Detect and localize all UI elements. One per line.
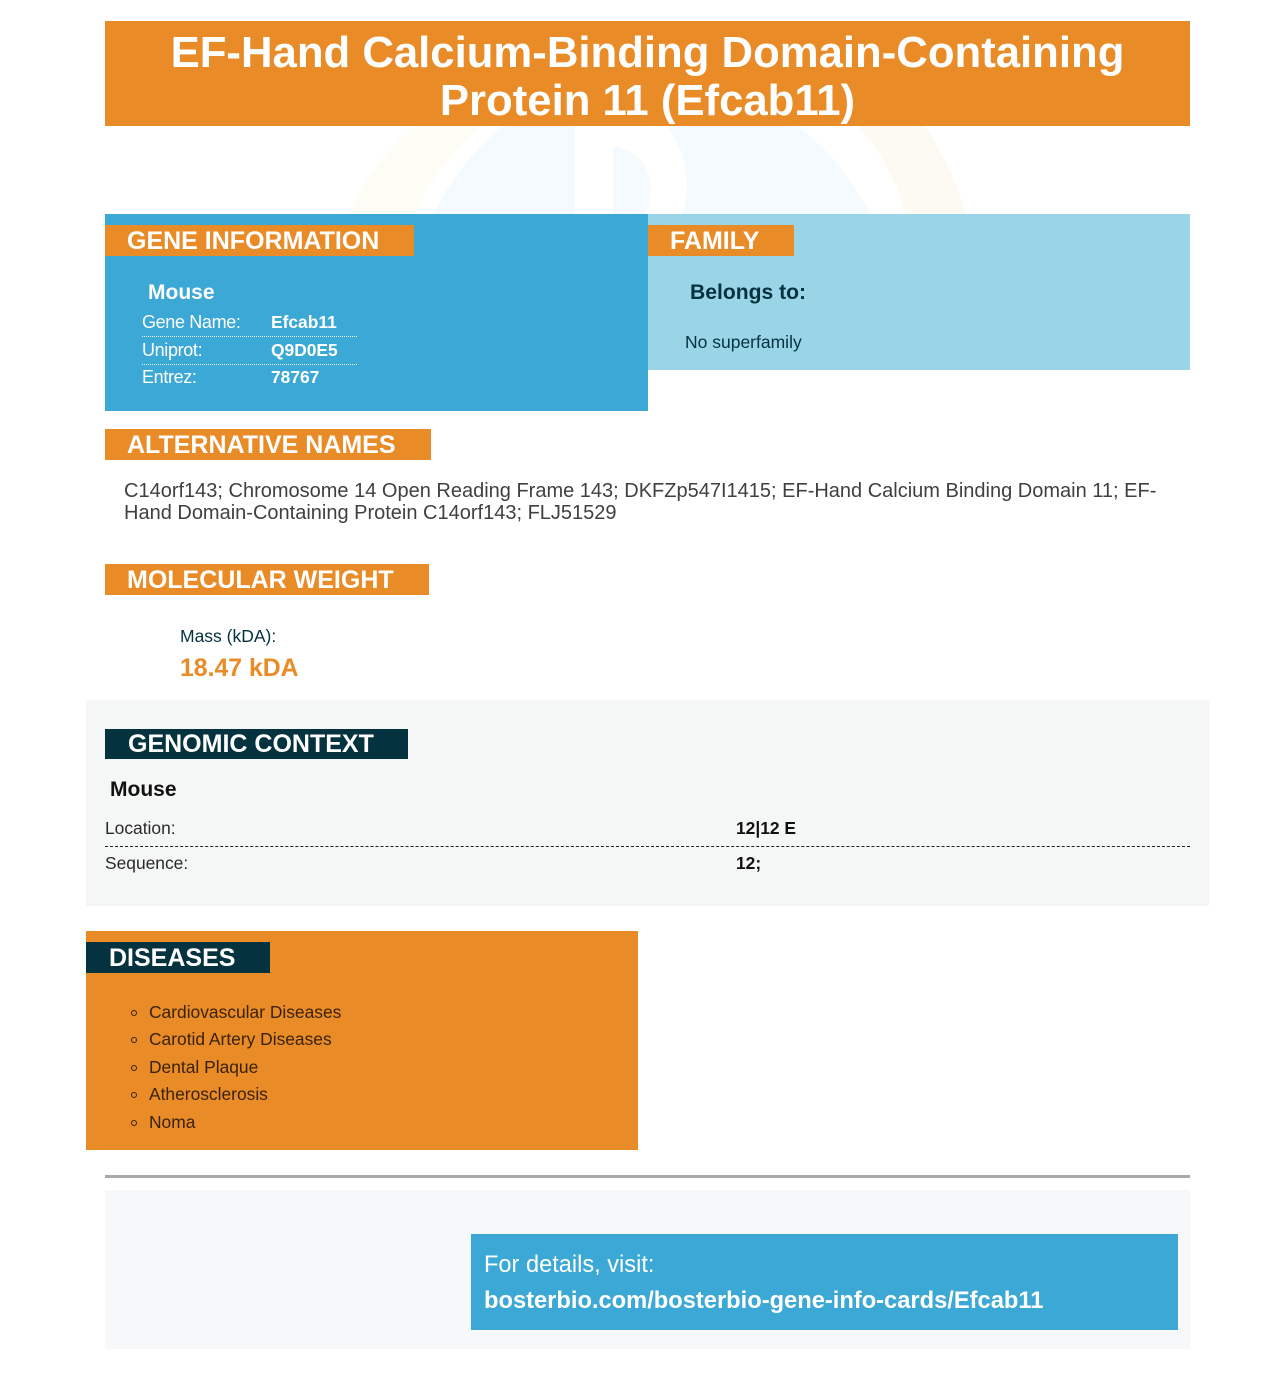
row: location: Location: xyxy=(105,818,176,838)
row: location: 12|12 E xyxy=(736,818,796,838)
belongs to label: Belongs to: xyxy=(690,281,806,304)
alternative names text xyxy=(124,480,1156,524)
title banner xyxy=(105,21,1190,126)
panel: family xyxy=(648,214,1190,370)
panel: gene information xyxy=(105,214,648,411)
row: sequence: 12; xyxy=(736,853,761,873)
heading: family xyxy=(648,225,794,256)
row: gene name xyxy=(142,309,357,337)
row: uniprot: Uniprot: xyxy=(142,340,202,360)
panel: genomic context xyxy=(86,700,1209,906)
panel: diseases xyxy=(86,931,638,1150)
title banner: EF-Hand Calcium-Binding Domain-Containing xyxy=(171,28,1124,77)
item: cardiovascular diseases: Cardiovascular Diseases xyxy=(149,1002,341,1022)
species label: Mouse xyxy=(110,778,177,801)
footer rule xyxy=(105,1175,1190,1178)
row: sequence xyxy=(105,853,761,873)
row: entrez: Entrez: xyxy=(142,367,197,387)
heading: family: FAMILY xyxy=(670,227,759,255)
alternative names text: Hand Domain-Containing Protein C14orf143; FLJ51529 xyxy=(124,502,617,524)
heading: diseases xyxy=(86,942,270,973)
row: sequence: Sequence: xyxy=(105,853,188,873)
species label: Mouse xyxy=(148,281,215,304)
callout label: For details, visit: xyxy=(484,1252,654,1278)
heading: molecular weight: MOLECULAR WEIGHT xyxy=(127,566,394,594)
item: dental plaque: Dental Plaque xyxy=(149,1057,258,1077)
disease list xyxy=(131,1002,341,1132)
watermark logo xyxy=(348,126,966,214)
row: entrez: 78767 xyxy=(271,367,319,387)
title banner: Protein 11 (Efcab11) xyxy=(440,76,855,125)
heading: genomic context: GENOMIC CONTEXT xyxy=(128,730,374,758)
item: atherosclerosis: Atherosclerosis xyxy=(149,1084,268,1104)
mass label: Mass (kDA): xyxy=(180,626,276,646)
panel: footer xyxy=(105,1190,1190,1349)
callout url: bosterbio.com/bosterbio-gene-info-cards/Efcab11 xyxy=(484,1288,1043,1314)
row: uniprot xyxy=(142,337,357,365)
row: entrez xyxy=(142,367,319,387)
heading: alternative names: ALTERNATIVE NAMES xyxy=(127,431,396,459)
alternative names text: C14orf143; Chromosome 14 Open Reading Frame 143; DKFZp547I1415; EF-Hand Calcium Binding Domain 11; EF- xyxy=(124,480,1156,502)
item: noma: Noma xyxy=(149,1112,195,1132)
row: gene name: Gene Name: xyxy=(142,312,241,332)
row: uniprot: Q9D0E5 xyxy=(271,340,338,360)
row: location xyxy=(105,814,1190,847)
heading: diseases: DISEASES xyxy=(109,944,235,972)
heading: gene information: GENE INFORMATION xyxy=(127,227,379,255)
family value: No superfamily xyxy=(685,332,802,352)
callout: details link xyxy=(471,1234,1178,1330)
mass value: 18.47 kDA xyxy=(180,655,299,682)
item: carotid artery diseases: Carotid Artery Diseases xyxy=(149,1029,332,1049)
row: gene name: Efcab11 xyxy=(271,312,337,332)
